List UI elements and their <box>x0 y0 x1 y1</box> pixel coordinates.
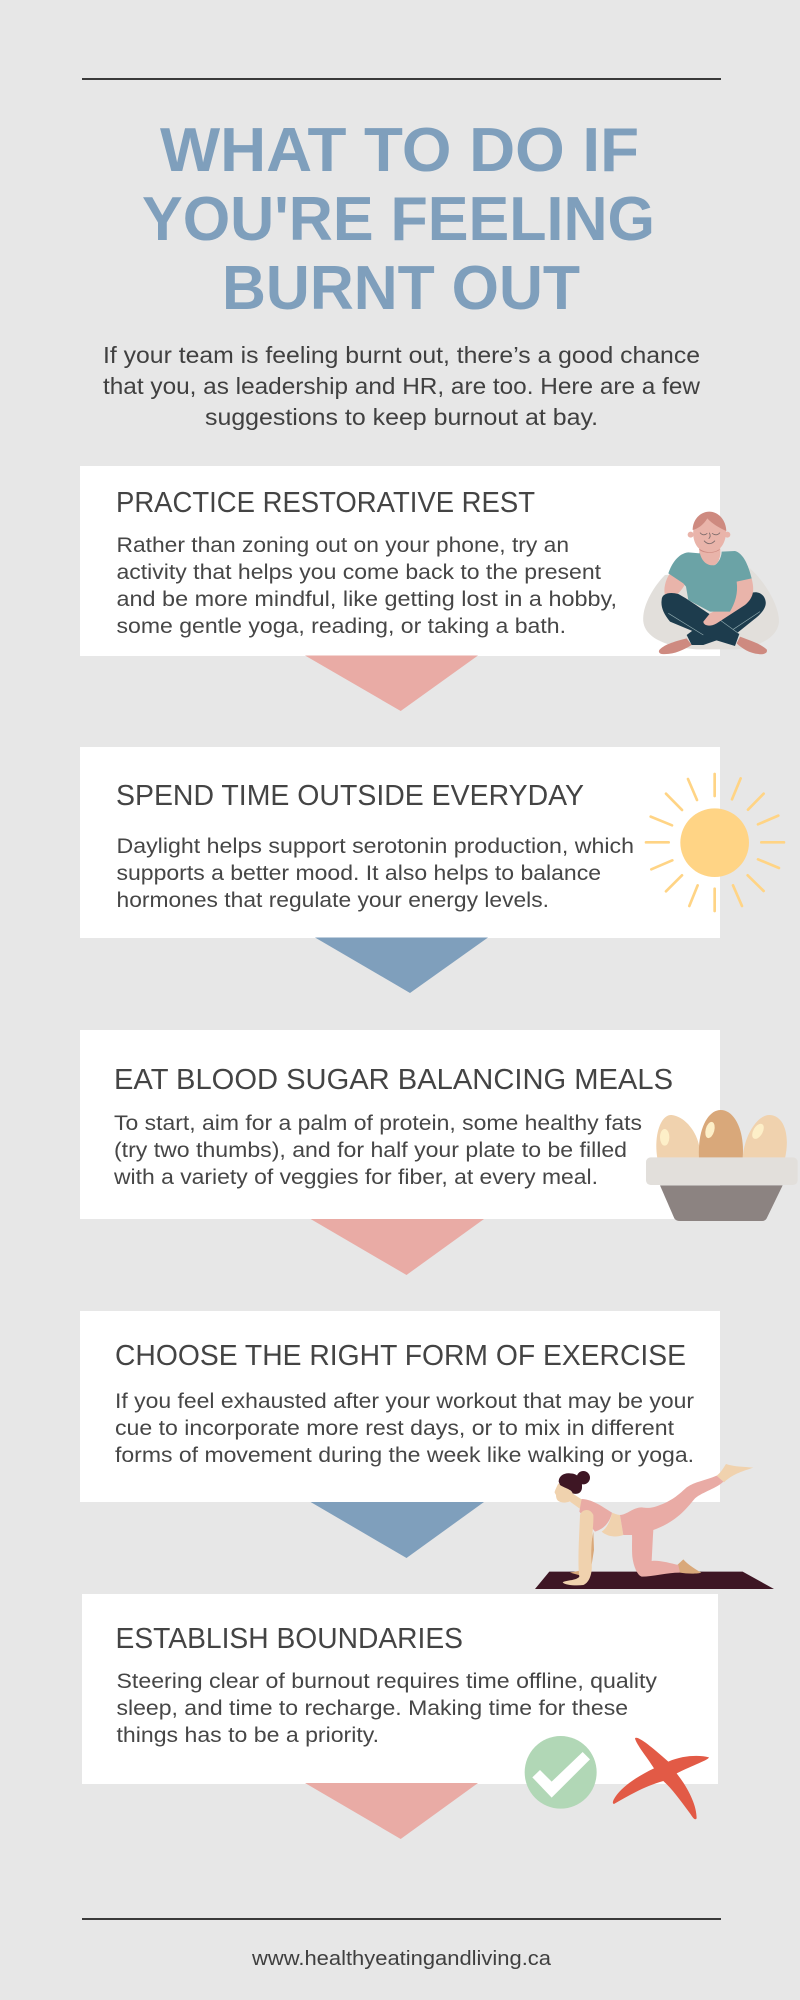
icon: red cross <box>613 1738 709 1819</box>
icon: woman doing yoga <box>535 1464 774 1589</box>
body text: with a variety of veggies for fiber, at every meal. <box>113 1166 598 1189</box>
body text: cue to incorporate more rest days, or to mix in different <box>115 1417 674 1440</box>
arrow: pink triangle <box>305 1783 478 1839</box>
arrow: blue triangle <box>315 938 488 993</box>
body text <box>115 1390 694 1467</box>
body text: Rather than zoning out on your phone, try an <box>116 534 569 557</box>
heading: PRACTICE RESTORATIVE REST <box>116 487 535 519</box>
icon: bowl of eggs <box>646 1110 798 1221</box>
body text: hormones that regulate your energy levels. <box>116 889 549 912</box>
body text: To start, aim for a palm of protein, some healthy fats <box>114 1112 642 1135</box>
panel: choose the right form of exercise <box>80 1311 774 1589</box>
body text: (try two thumbs), and for half your plate to be filled <box>114 1139 627 1162</box>
intro text: that you, as leadership and HR, are too. Here are a few <box>103 373 700 399</box>
body text <box>113 1112 642 1189</box>
body text <box>116 1670 658 1747</box>
body text: forms of movement during the week like walking or yoga. <box>115 1444 694 1467</box>
footer website: www.healthyeatingandliving.ca <box>251 1948 552 1970</box>
body text: Daylight helps support serotonin production, which <box>116 835 634 858</box>
intro text: suggestions to keep burnout at bay. <box>205 404 598 430</box>
icon: meditating person <box>643 512 779 654</box>
body text: activity that helps you come back to the present <box>116 561 601 584</box>
panel: practice restorative rest <box>80 466 779 711</box>
card background <box>82 1594 718 1784</box>
body text: supports a better mood. It also helps to balance <box>116 862 601 885</box>
intro text <box>103 342 700 430</box>
title <box>142 116 655 323</box>
arrow: blue triangle <box>311 1502 484 1558</box>
body text: and be more mindful, like getting lost in a hobby, <box>116 588 617 611</box>
body text: sleep, and time to recharge. Making time for these <box>116 1697 628 1720</box>
panel: spend time outside everyday <box>80 747 784 993</box>
title: YOU'RE FEELING <box>142 185 655 254</box>
body text <box>116 835 634 912</box>
body text <box>116 534 617 638</box>
body text: If you feel exhausted after your workout that may be your <box>115 1390 694 1413</box>
heading: SPEND TIME OUTSIDE EVERYDAY <box>116 780 584 812</box>
card background <box>80 1311 720 1502</box>
arrow: pink triangle <box>311 1219 484 1275</box>
icon: sun <box>646 774 784 911</box>
arrow: pink triangle <box>305 656 478 711</box>
heading: CHOOSE THE RIGHT FORM OF EXERCISE <box>115 1340 686 1372</box>
title: BURNT OUT <box>222 254 580 323</box>
heading: ESTABLISH BOUNDARIES <box>116 1623 463 1655</box>
body text: Steering clear of burnout requires time offline, quality <box>116 1670 658 1693</box>
body text: things has to be a priority. <box>116 1724 379 1747</box>
intro text: If your team is feeling burnt out, there’s a good chance <box>103 342 700 368</box>
panel: eat blood sugar balancing meals <box>80 1030 798 1275</box>
card background <box>80 747 720 938</box>
panel: establish boundaries <box>82 1594 718 1839</box>
card background <box>80 1030 720 1219</box>
icon: green check mark <box>525 1736 597 1809</box>
title: WHAT TO DO IF <box>160 116 639 185</box>
card background <box>80 466 720 656</box>
body text: some gentle yoga, reading, or taking a bath. <box>116 615 566 638</box>
heading: EAT BLOOD SUGAR BALANCING MEALS <box>114 1064 673 1096</box>
